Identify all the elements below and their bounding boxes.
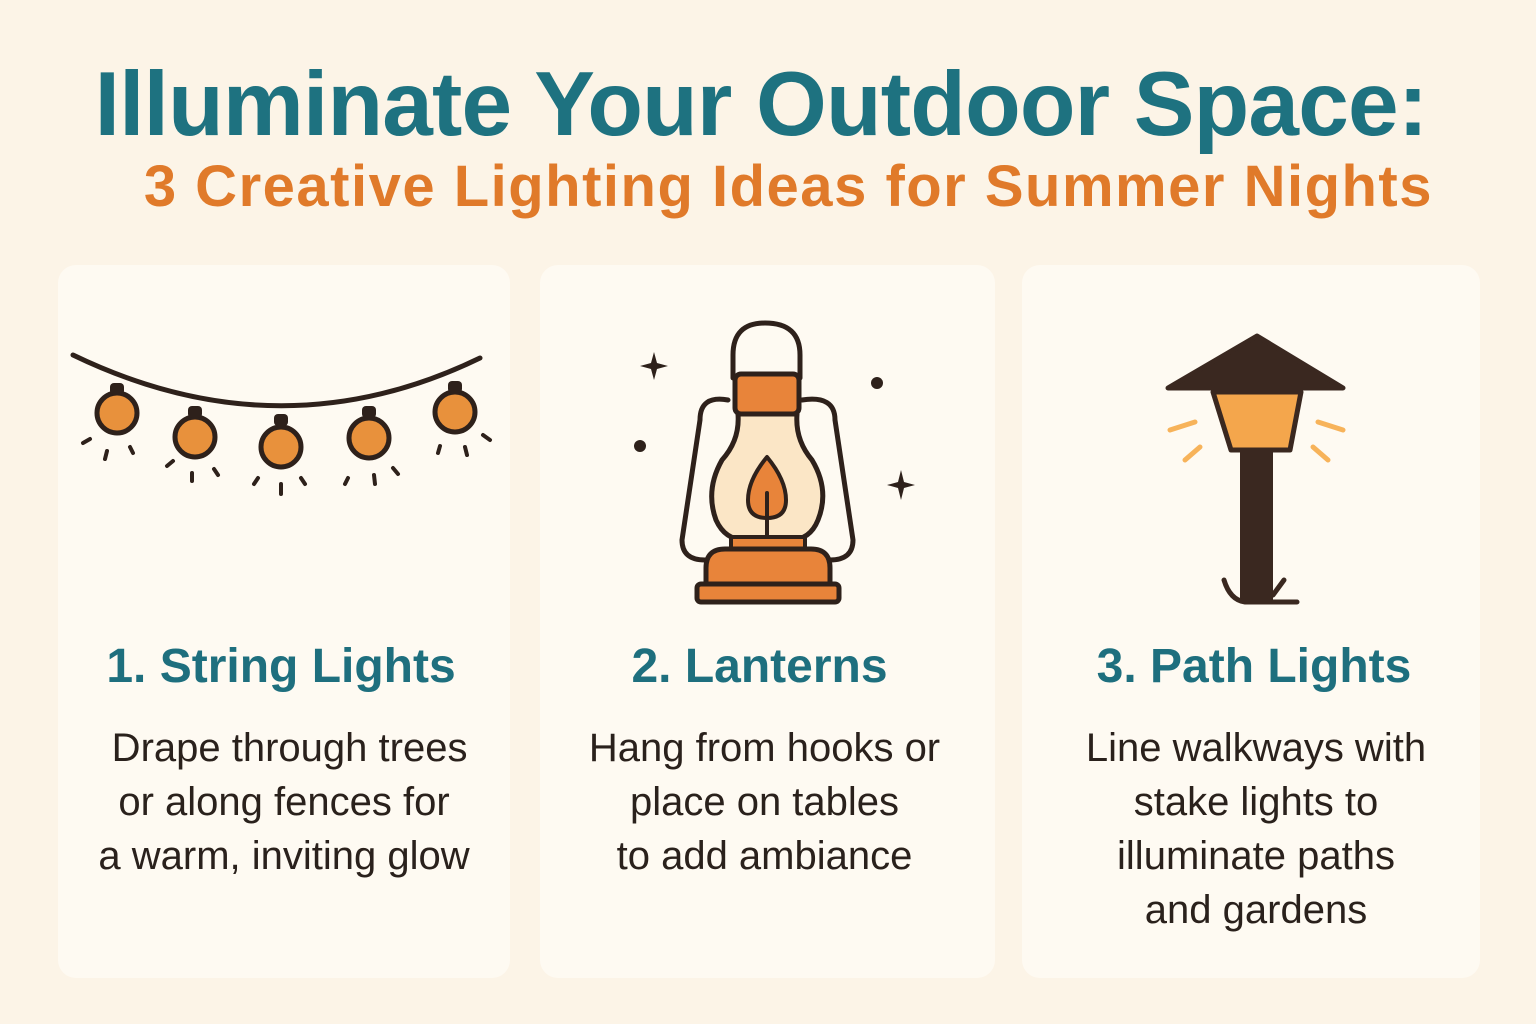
panel: string lights [58, 265, 510, 978]
subtitle: 3 Creative Lighting Ideas for Summer Nights [144, 154, 1433, 219]
icon: sparkles [634, 352, 915, 500]
text: path lights: illuminate paths [1117, 834, 1395, 878]
text: path lights: Line walkways with [1086, 726, 1426, 770]
icon: path light [1168, 336, 1343, 602]
text: lanterns [589, 726, 940, 878]
text: lanterns: Hang from hooks or [589, 726, 940, 770]
icon: string lights [73, 355, 490, 494]
title: Illuminate Your Outdoor Space: [95, 54, 1427, 155]
text: string lights [98, 726, 470, 878]
icon: lantern [682, 323, 853, 602]
text: string lights: a warm, inviting glow [98, 834, 470, 878]
panel: path lights [1022, 265, 1480, 978]
text: string lights: Drape through trees [112, 726, 467, 770]
text: path lights: stake lights to [1134, 780, 1378, 824]
text: lanterns: place on tables [630, 780, 899, 824]
text: path lights: and gardens [1145, 888, 1367, 932]
text: path lights [1086, 726, 1426, 932]
heading: string lights: 1. String Lights [106, 640, 456, 693]
heading: path lights: 3. Path Lights [1097, 640, 1411, 693]
heading: lanterns: 2. Lanterns [631, 640, 888, 693]
text: string lights: or along fences for [118, 780, 450, 824]
panel: lanterns [540, 265, 995, 978]
text: lanterns: to add ambiance [617, 834, 912, 878]
